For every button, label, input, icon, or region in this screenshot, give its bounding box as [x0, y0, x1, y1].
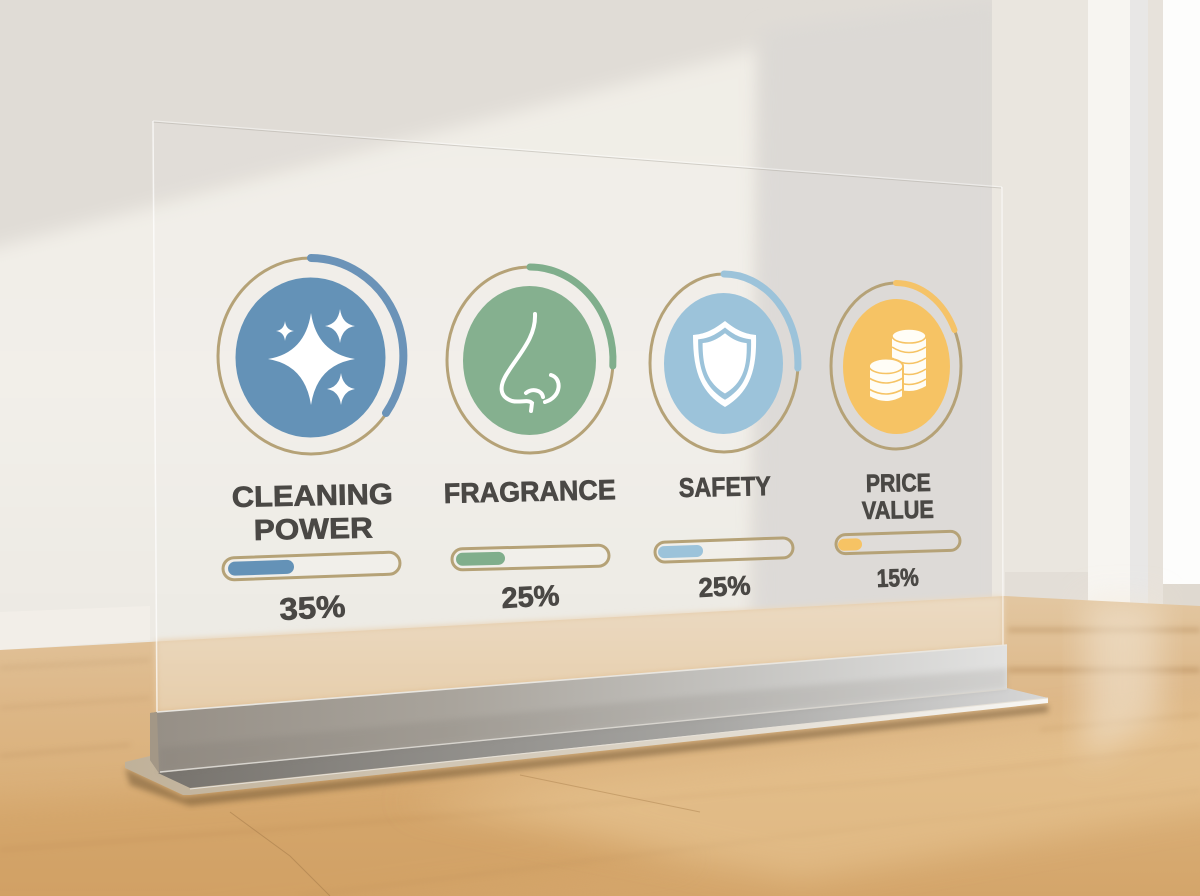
progress bar: 25%	[452, 545, 609, 570]
ring: cleaning power progress	[218, 258, 404, 454]
ring: fragrance progress	[447, 267, 613, 453]
label: price value	[862, 469, 934, 525]
value: 15%: 15%	[876, 564, 919, 593]
value: 25%: 25%	[698, 570, 751, 603]
panel: glass sheet	[153, 121, 1003, 712]
metric: price value	[831, 283, 961, 593]
label: cleaning power	[231, 479, 393, 547]
label: fragrance: FRAGRANCE	[443, 474, 616, 509]
floor: wood planks	[0, 596, 1200, 896]
value: 35%: 35%	[279, 589, 346, 627]
label: price value: VALUE	[862, 496, 934, 525]
icon: coin stacks	[843, 299, 950, 434]
progress bar: 15%	[836, 531, 960, 554]
stand: metal base	[125, 645, 1048, 795]
metric: cleaning power	[218, 258, 404, 627]
label: cleaning power: CLEANING	[231, 479, 393, 514]
progress bar: 25%	[655, 538, 793, 562]
label: safety: SAFETY	[678, 471, 771, 503]
label: cleaning power: POWER	[253, 513, 373, 547]
icon: shield	[664, 293, 783, 434]
metric: fragrance	[443, 267, 616, 615]
ring: price value progress	[831, 283, 961, 449]
icon: sparkles	[236, 278, 386, 438]
ring: safety progress	[650, 274, 798, 452]
value: 25%: 25%	[501, 580, 560, 615]
progress bar: 35%	[223, 552, 400, 580]
metric: safety	[650, 274, 798, 603]
label: price value: PRICE	[866, 469, 931, 498]
icon: nose	[463, 286, 596, 435]
